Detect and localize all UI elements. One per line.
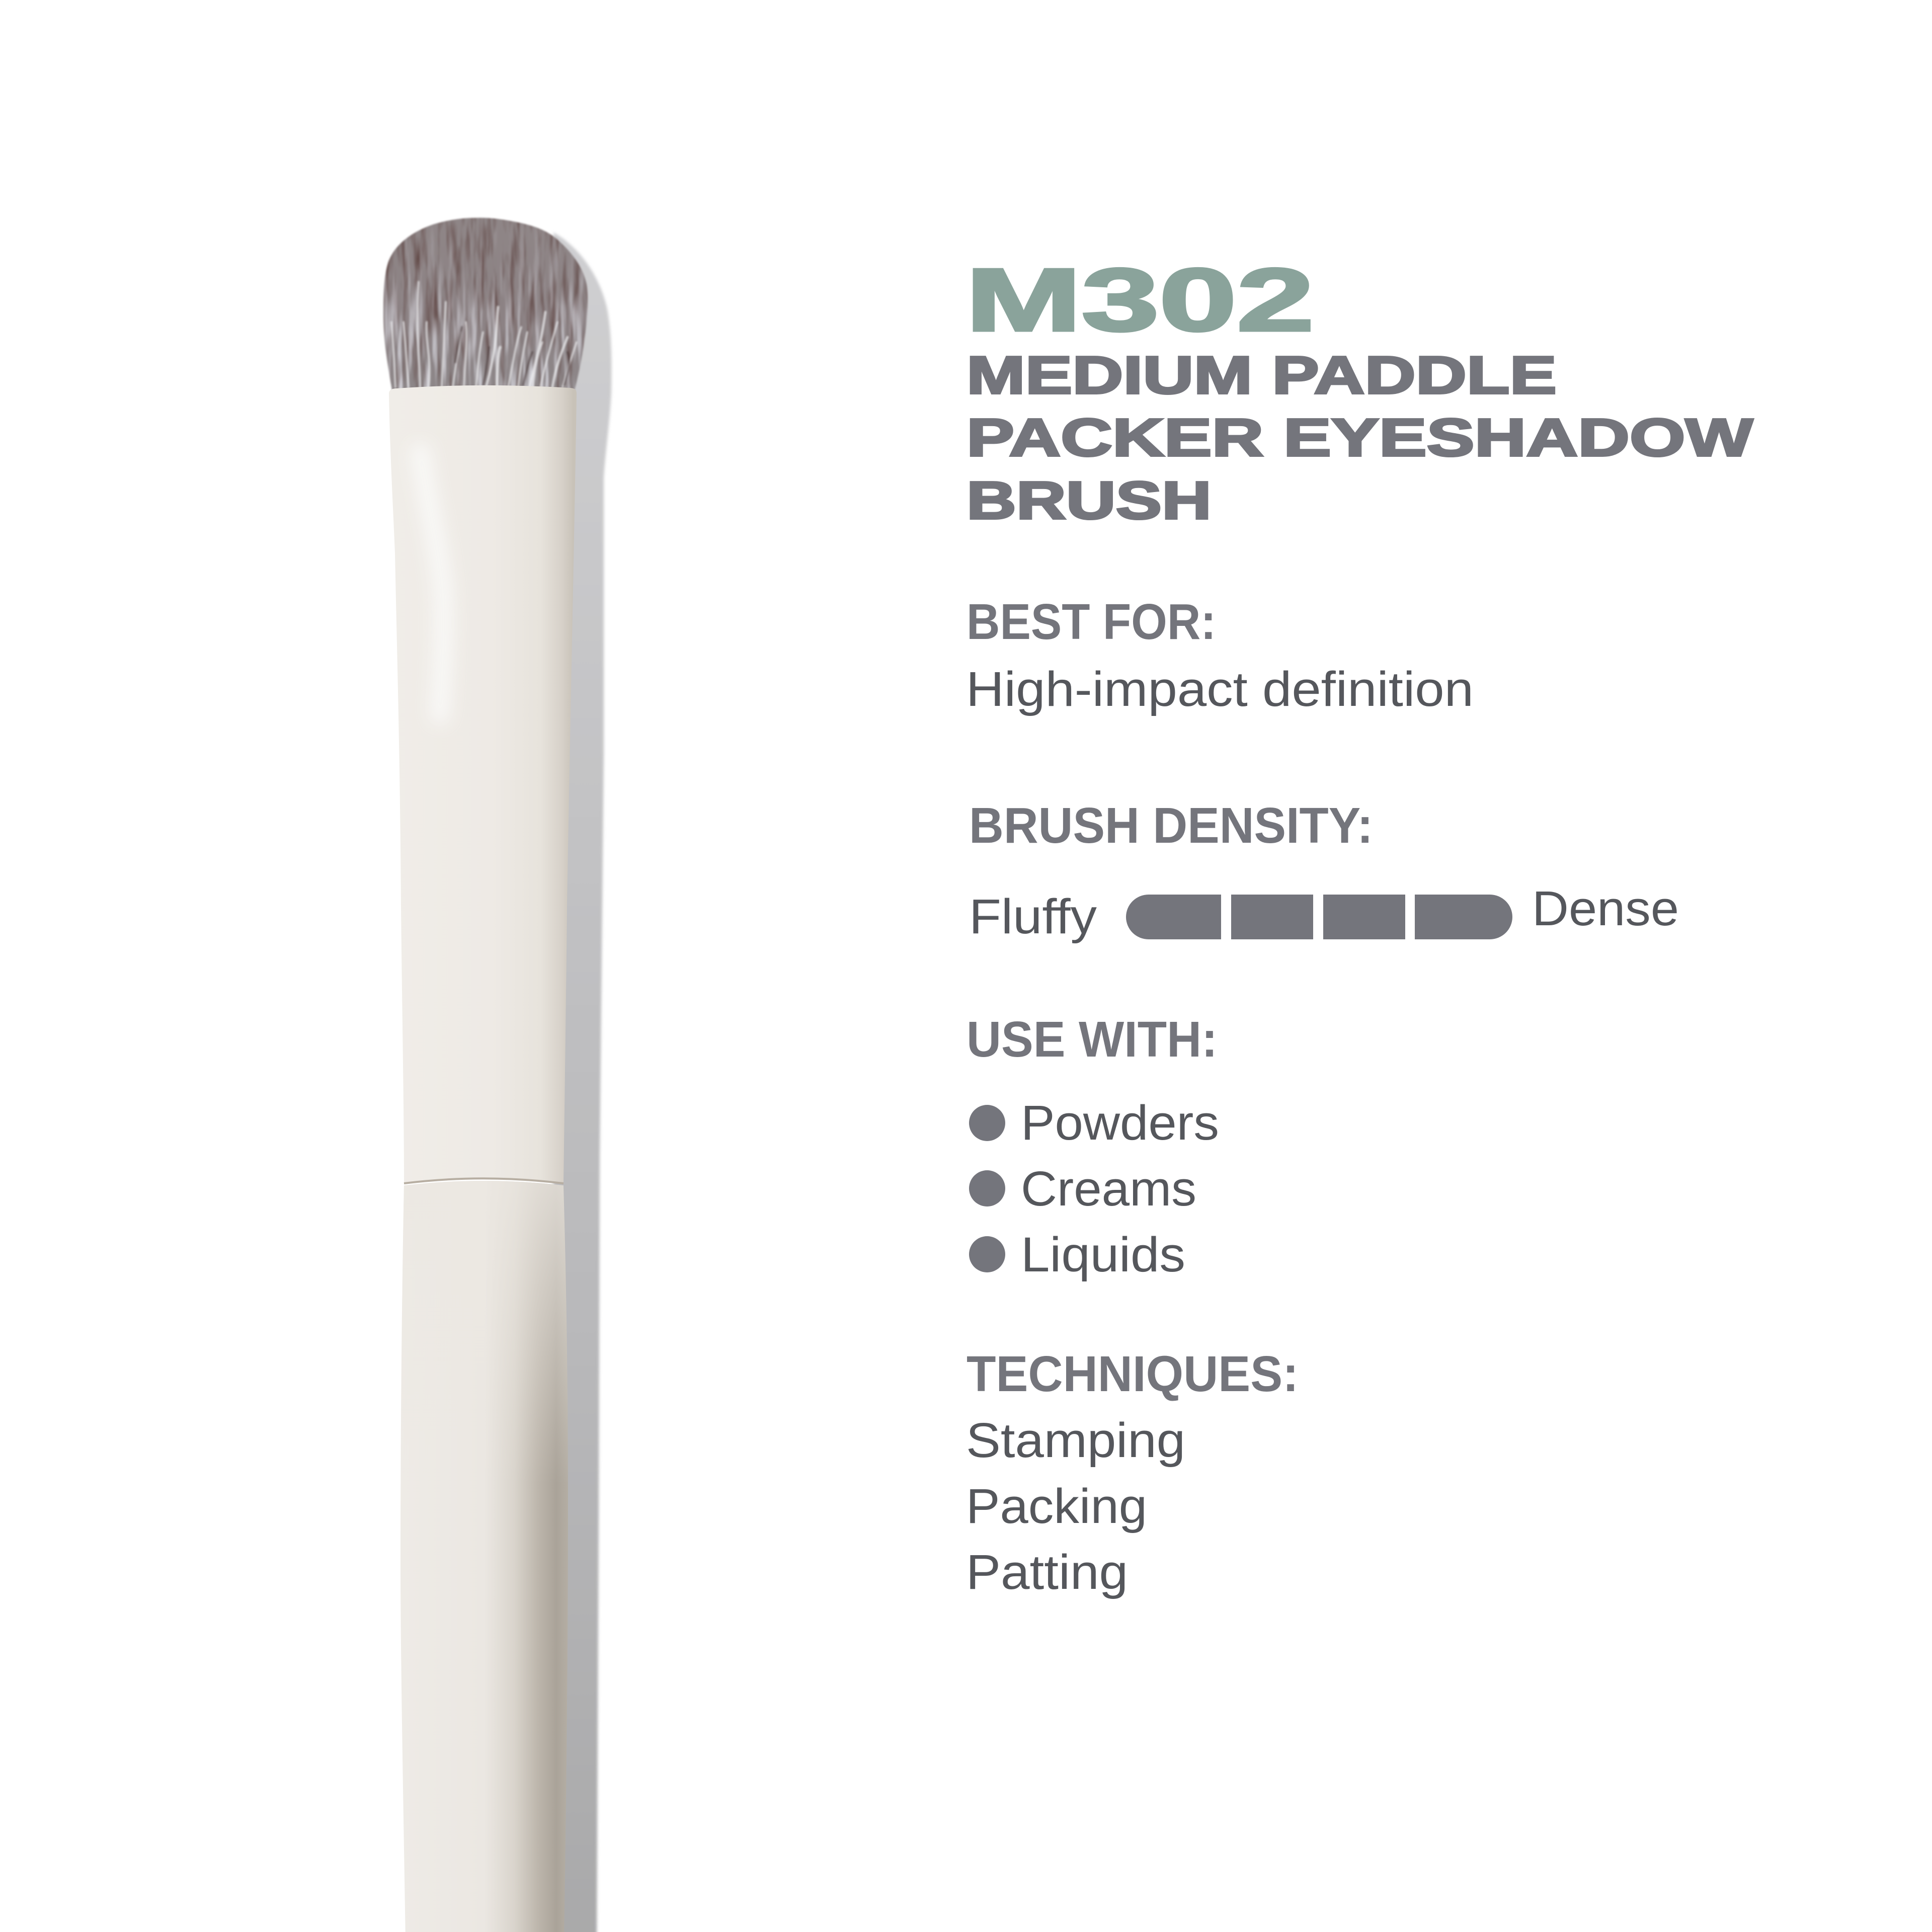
powders item: Powders: [1021, 1095, 1219, 1150]
product name: MEDIUM PADDLE: [967, 346, 1557, 405]
product name: BRUSH: [967, 471, 1212, 530]
lower handle sheen: [400, 1181, 568, 1509]
product name: PACKER EYESHADOW: [967, 408, 1753, 467]
brush density section: [969, 797, 1679, 944]
infographic canvas: [382, 216, 1755, 1932]
brush cast shadow: [553, 232, 611, 1932]
techniques section: Stamping: [966, 1413, 1185, 1468]
creams item: Creams: [1021, 1161, 1196, 1216]
ferrule highlight: [420, 453, 444, 714]
techniques section: Packing: [966, 1479, 1147, 1534]
product name: [967, 346, 1753, 530]
best for section: BEST FOR:: [967, 594, 1216, 650]
techniques section: [966, 1346, 1299, 1599]
use with section: [967, 1011, 1219, 1282]
lower handle: [400, 1181, 568, 1932]
brush bristles: [382, 216, 589, 389]
techniques section: TECHNIQUES:: [967, 1346, 1299, 1402]
ferrule and upper handle: [389, 385, 577, 1183]
dense label: Dense: [1532, 881, 1679, 936]
best for section: High-impact definition: [966, 662, 1474, 716]
fluffy label: Fluffy: [969, 889, 1097, 944]
use with heading: USE WITH:: [967, 1011, 1218, 1068]
brush illustration: [372, 211, 611, 1932]
best for section: [966, 594, 1474, 716]
density heading: BRUSH DENSITY:: [969, 797, 1373, 854]
techniques section: Patting: [966, 1545, 1128, 1599]
liquids item: Liquids: [1021, 1227, 1185, 1282]
model number: M302: [965, 250, 1314, 350]
density meter: [1126, 895, 1512, 939]
handle seam: [404, 1178, 564, 1183]
